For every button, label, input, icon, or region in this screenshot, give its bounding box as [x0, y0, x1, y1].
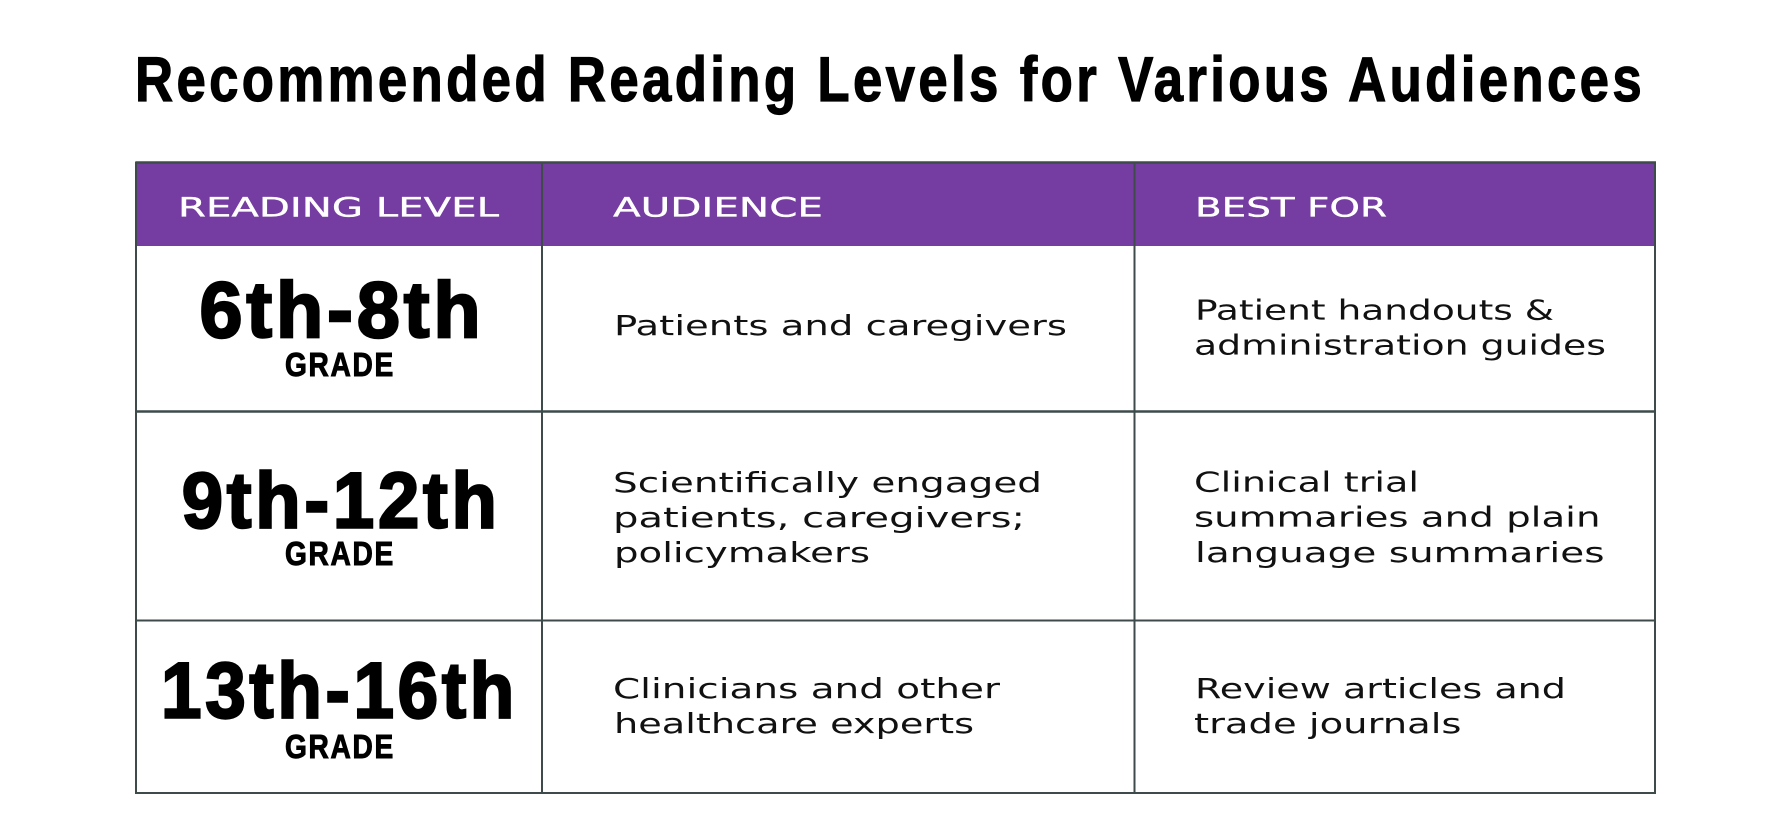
row 2 best for [1194, 467, 1604, 569]
row 2 audience: policymakers [614, 537, 870, 569]
table [136, 162, 1656, 793]
row 3 best for: trade journals [1194, 708, 1462, 740]
row 1 best for: Patient handouts & [1195, 294, 1554, 326]
row 2 audience [613, 467, 1042, 569]
row 2 reading level: GRADE [285, 535, 395, 572]
row 2 audience: Scientifically engaged [613, 467, 1042, 499]
row 1 best for: administration guides [1194, 330, 1606, 362]
header: audience: AUDIENCE [613, 192, 823, 224]
row 3 reading level: GRADE [285, 728, 395, 765]
table header band [136, 162, 1656, 246]
row 1 best for [1194, 294, 1606, 362]
row 2 reading level: 9th-12th [182, 456, 501, 545]
row 2 best for: Clinical trial [1194, 467, 1419, 499]
row 3 best for: Review articles and [1195, 673, 1566, 705]
row 1 audience: Patients and caregivers [614, 310, 1067, 342]
row 3 audience: healthcare experts [614, 708, 974, 740]
row 3 audience [613, 673, 1001, 740]
row 2 best for: language summaries [1195, 537, 1604, 569]
table grid [136, 162, 1656, 793]
row 3 reading level: 13th-16th [161, 646, 518, 735]
header: best for: BEST FOR [1195, 192, 1387, 224]
row 3 audience: Clinicians and other [613, 673, 1001, 705]
row 2 best for: summaries and plain [1194, 502, 1600, 534]
row 2 audience: patients, caregivers; [613, 502, 1025, 534]
row 1 reading level: 6th-8th [200, 265, 484, 354]
row 1 reading level: GRADE [285, 346, 395, 383]
row 3 best for [1194, 673, 1566, 740]
header: reading level: READING LEVEL [178, 192, 499, 224]
